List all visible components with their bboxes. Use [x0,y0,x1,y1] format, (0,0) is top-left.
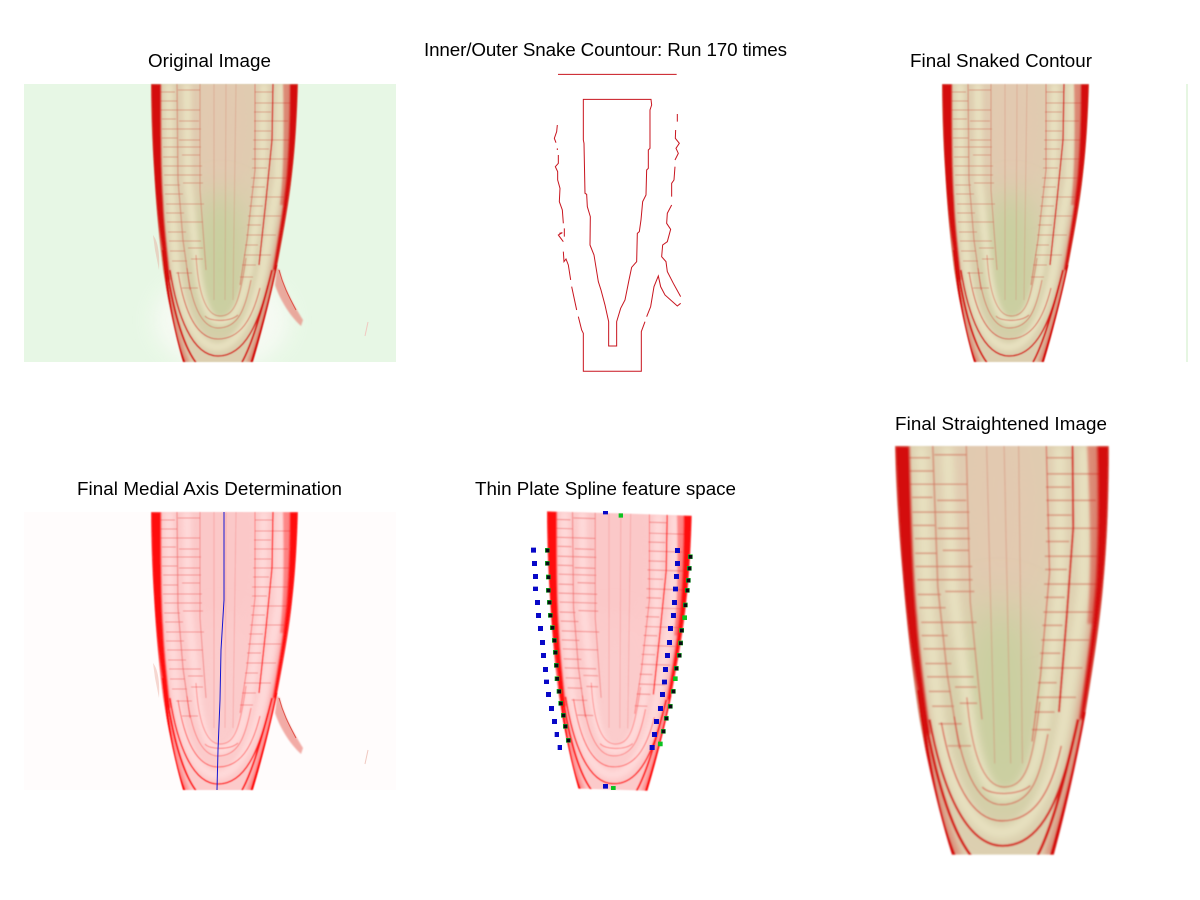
heading: final snaked contour: Final Snaked Contour [910,50,1092,71]
photo: warped root tip [541,467,699,794]
panel: final snaked contour [910,40,1096,364]
contour lines [554,74,681,371]
heading: medial axis: Final Medial Axis Determination [77,478,342,499]
medial axis line [217,512,224,790]
photo: root tip on pale green background [24,40,396,402]
heading: snake contour: Inner/Outer Snake Countour: Run 170 times [424,39,787,60]
panel: final medial axis determination [24,468,396,792]
landmark points [531,511,693,790]
photo: red root tip with medial axis [24,468,396,792]
heading: final straightened image: Final Straightened Image [895,413,1107,434]
heading: original image: Original Image [148,50,271,71]
panel: original image [24,40,396,402]
photo: straightened root tip [885,381,1130,858]
photo: root tip with background removed [936,40,1096,364]
heading: thin plate spline: Thin Plate Spline feature space [475,478,736,499]
panel: final straightened image [885,381,1130,858]
panel: inner and outer snake contour [424,39,787,371]
panel: thin plate spline feature space [475,467,736,794]
